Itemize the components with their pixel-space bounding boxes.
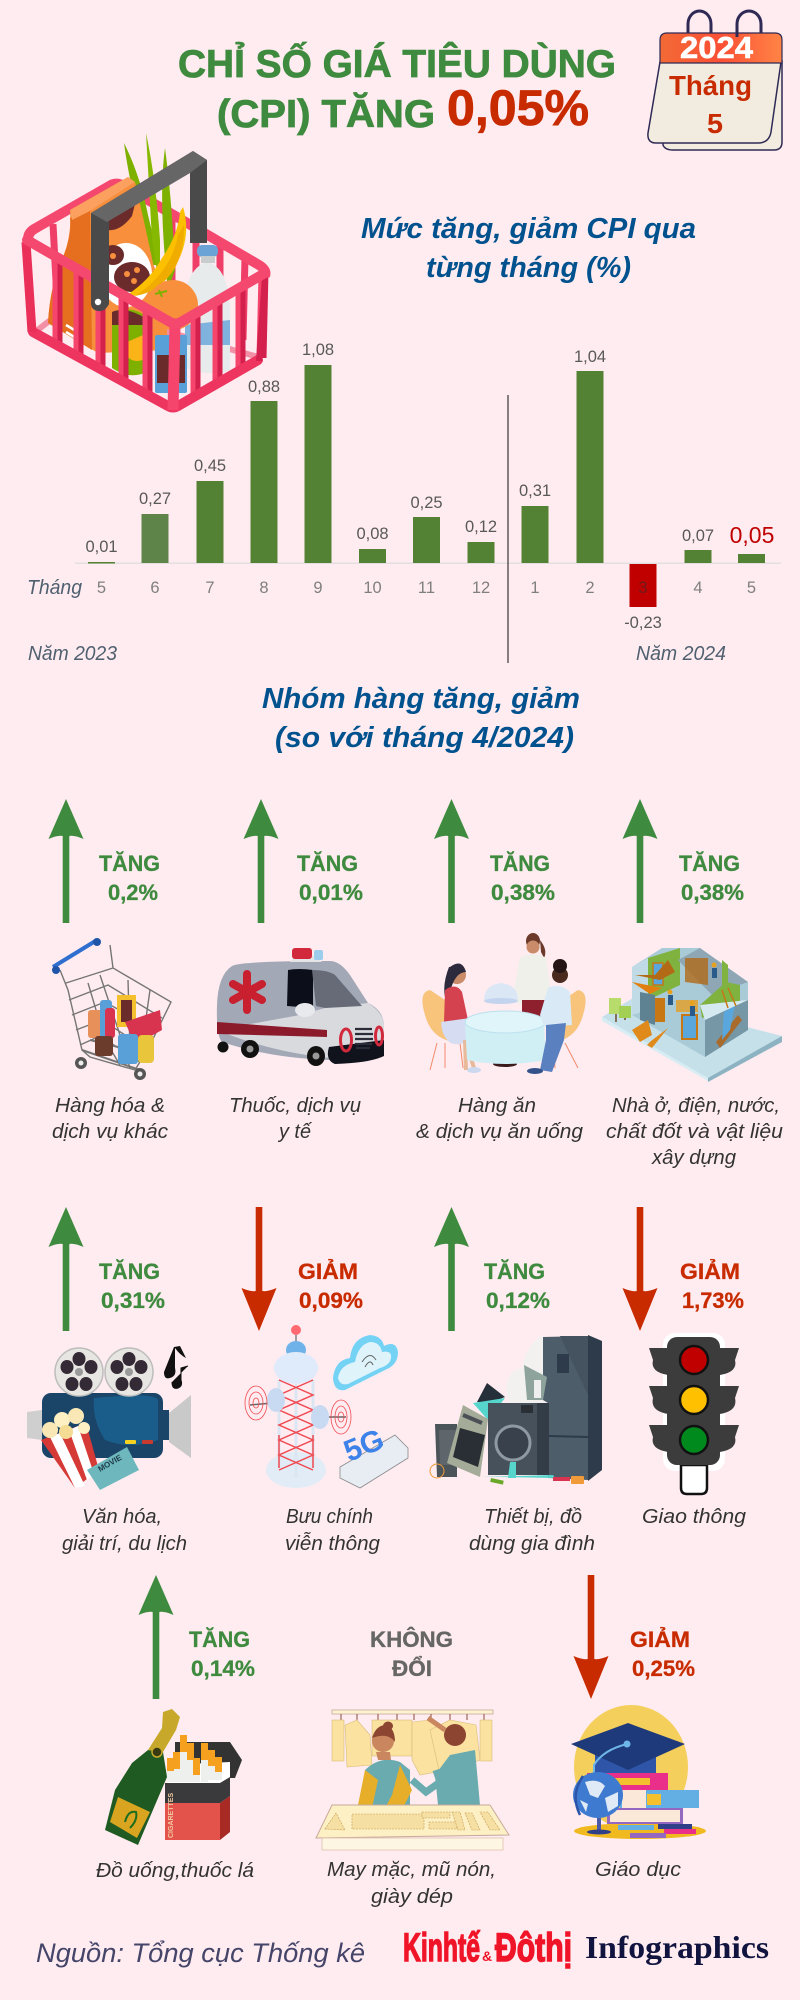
arrow: up — [48, 1207, 84, 1331]
bar chart: monthly CPI change: 5 — [97, 579, 106, 597]
icon: champagne and cigarettes — [105, 1709, 242, 1845]
value: up 0.38 percent: TĂNG — [679, 851, 740, 876]
panel: goods and other services — [48, 799, 171, 1143]
icon: calendar: Tháng — [669, 70, 752, 101]
value: down 1.73 percent — [680, 1259, 744, 1313]
icon: movie camera and popcorn: MOVIE — [96, 1453, 124, 1474]
caption — [285, 1506, 380, 1555]
arrow: up — [434, 1207, 469, 1331]
source note: Nguồn: Tổng cục Thống kê — [36, 1938, 365, 1968]
value: up 0.38 percent: TĂNG — [490, 851, 550, 876]
value: up 0.2 percent — [99, 851, 160, 905]
caption — [606, 1095, 783, 1169]
icon: traffic light — [649, 1333, 739, 1494]
caption: dùng gia đình — [469, 1533, 595, 1555]
bar chart: monthly CPI change: 2 — [585, 579, 595, 597]
value: unchanged: KHÔNG — [370, 1627, 453, 1652]
value: down 1.73 percent: 1,73% — [682, 1288, 744, 1313]
bar chart: monthly CPI change: 1,04 — [574, 348, 606, 366]
icon: 5G tower and cloud — [245, 1325, 408, 1488]
value: down 1.73 percent: GIẢM — [680, 1259, 740, 1284]
value: unchanged — [370, 1627, 453, 1681]
icon: movie camera and popcorn — [27, 1346, 191, 1490]
caption: Đồ uống,thuốc lá — [96, 1860, 254, 1882]
icon: calendar: 5 — [707, 108, 723, 139]
icon: restaurant scene — [422, 933, 586, 1074]
icon: calendar — [648, 11, 782, 150]
bar chart: monthly CPI change: 1 — [530, 579, 540, 597]
value: down 0.09 percent: GIẢM — [298, 1259, 358, 1284]
heading: monthly chart: từng tháng (%) — [426, 252, 631, 284]
caption: Giao thông — [642, 1506, 746, 1528]
arrow: up — [622, 799, 658, 923]
caption: chất đốt và vật liệu — [606, 1121, 783, 1143]
value: up 0.01 percent: 0,01% — [299, 880, 363, 905]
bar chart: monthly CPI change: 0,88 — [248, 378, 280, 396]
value: up 0.31 percent: TĂNG — [99, 1259, 160, 1284]
title: (CPI) TĂNG — [217, 92, 435, 136]
value: unchanged: ĐỔI — [392, 1656, 432, 1681]
bar chart: monthly CPI change: 12 — [472, 579, 490, 597]
value: up 0.14 percent: 0,14% — [191, 1656, 255, 1681]
bar chart: monthly CPI change: 6 — [150, 579, 160, 597]
panel: food and catering — [416, 799, 586, 1143]
bar chart: monthly CPI change: 0,08 — [356, 525, 389, 543]
value: up 0.14 percent: TĂNG — [189, 1627, 250, 1652]
bar chart: monthly CPI change — [27, 341, 781, 665]
arrow: up — [48, 799, 84, 923]
arrow: down — [622, 1207, 658, 1331]
value: up 0.38 percent: 0,38% — [681, 880, 744, 905]
caption: xây dựng — [651, 1147, 736, 1169]
panel: clothing, hats, footwear — [316, 1627, 509, 1908]
caption: Bưu chính — [286, 1506, 373, 1528]
icon: tailors at work — [316, 1710, 509, 1850]
arrow: down — [242, 1207, 276, 1331]
icon: household appliances — [430, 1335, 602, 1485]
logo: Kinh te & Do thi Infographics — [403, 1926, 769, 1970]
heading: product groups: Nhóm hàng tăng, giảm — [262, 683, 580, 715]
icon: graduation cap, globe and books — [571, 1705, 706, 1839]
caption — [229, 1095, 361, 1143]
caption: giày dép — [371, 1886, 453, 1908]
icon: ambulance — [217, 948, 384, 1066]
panel: housing, electricity, water, fuel — [602, 799, 783, 1169]
bar chart: monthly CPI change: 0,05 — [730, 522, 774, 548]
title — [178, 41, 616, 136]
panel: household appliances — [430, 1207, 602, 1555]
caption — [327, 1859, 496, 1908]
value: up 0.01 percent: TĂNG — [297, 851, 358, 876]
bar chart: monthly CPI change: 0,07 — [682, 527, 714, 545]
value: up 0.2 percent: 0,2% — [108, 880, 158, 905]
value: up 0.2 percent: TĂNG — [99, 851, 160, 876]
caption: Văn hóa, — [82, 1506, 162, 1528]
value: up 0.12 percent: TĂNG — [484, 1259, 545, 1284]
panel: beverages and tobacco — [96, 1575, 255, 1882]
bar chart: monthly CPI change: Năm 2024 — [636, 643, 726, 665]
logo: Kinh te & Do thi Infographics: & — [482, 1948, 492, 1964]
caption: viễn thông — [285, 1532, 380, 1555]
value: up 0.38 percent: 0,38% — [491, 880, 555, 905]
bar chart: monthly CPI change: 3 — [638, 579, 648, 597]
heading: product groups: (so với tháng 4/2024) — [275, 722, 574, 754]
icon: 5G tower and cloud: 5G — [339, 1423, 389, 1468]
bar chart: monthly CPI change: 10 — [363, 579, 382, 597]
bar chart: monthly CPI change: 8 — [259, 579, 269, 597]
caption — [62, 1506, 187, 1555]
bar chart: monthly CPI change: 1,08 — [302, 341, 334, 359]
bar chart: monthly CPI change: 4 — [693, 579, 703, 597]
value: up 0.38 percent — [679, 851, 744, 905]
icon: champagne and cigarettes: CIGARETTES — [168, 1793, 175, 1838]
arrow: up — [244, 799, 278, 923]
bar chart: monthly CPI change: 0,12 — [465, 518, 497, 536]
caption — [416, 1095, 583, 1143]
panel: medicine and health services — [217, 799, 384, 1143]
heading: monthly chart: Mức tăng, giảm CPI qua — [361, 213, 696, 245]
bar chart: monthly CPI change: 9 — [313, 579, 323, 597]
value: down 0.09 percent: 0,09% — [299, 1288, 363, 1313]
caption: Giáo dục — [595, 1859, 681, 1881]
bar chart: monthly CPI change: 0,45 — [194, 457, 226, 475]
title: CHỈ SỐ GIÁ TIÊU DÙNG — [178, 41, 616, 86]
heading: monthly chart — [361, 213, 696, 284]
arrow: down — [574, 1575, 608, 1699]
bar chart: monthly CPI change: 0,27 — [139, 490, 171, 508]
panel: education — [571, 1575, 706, 1881]
bar chart: monthly CPI change: 0,31 — [519, 482, 551, 500]
caption: May mặc, mũ nón, — [327, 1859, 496, 1881]
value: down 0.25 percent: GIẢM — [630, 1627, 690, 1652]
value: up 0.12 percent — [484, 1259, 550, 1313]
panel: transport — [622, 1207, 746, 1528]
caption — [469, 1506, 595, 1555]
bar chart: monthly CPI change: Năm 2023 — [28, 643, 117, 665]
panel: post and telecommunications — [242, 1207, 408, 1555]
logo: Kinh te & Do thi Infographics: Đôthị — [495, 1926, 572, 1970]
caption: Hàng ăn — [458, 1095, 536, 1117]
icon: shopping cart — [52, 938, 171, 1080]
logo: Kinh te & Do thi Infographics: Kinhtế — [403, 1926, 480, 1970]
title: 0,05% — [447, 80, 589, 136]
bar chart: monthly CPI change: 11 — [418, 579, 435, 597]
caption: & dịch vụ ăn uống — [416, 1121, 583, 1143]
arrow: up — [434, 799, 469, 923]
logo: Kinh te & Do thi Infographics: Infographics — [585, 1929, 769, 1965]
caption — [52, 1095, 168, 1143]
icon: calendar: 2024 — [680, 30, 754, 65]
arrow: up — [138, 1575, 174, 1699]
caption: Nhà ở, điện, nước, — [612, 1095, 780, 1117]
caption: Thuốc, dịch vụ — [229, 1095, 361, 1117]
caption: y tế — [277, 1121, 313, 1143]
icon: isometric house under construction — [602, 948, 782, 1082]
bar chart: monthly CPI change: -0,23 — [624, 614, 662, 632]
caption: Hàng hóa & — [55, 1095, 165, 1117]
heading: product groups — [262, 683, 580, 754]
bar chart: monthly CPI change: 7 — [205, 579, 215, 597]
value: up 0.12 percent: 0,12% — [486, 1288, 550, 1313]
value: up 0.14 percent — [189, 1627, 255, 1681]
value: up 0.31 percent — [99, 1259, 165, 1313]
caption: dịch vụ khác — [52, 1121, 168, 1143]
value: up 0.01 percent — [297, 851, 363, 905]
bar chart: monthly CPI change: 0,25 — [410, 494, 443, 512]
value: up 0.31 percent: 0,31% — [101, 1288, 165, 1313]
value: up 0.38 percent — [490, 851, 555, 905]
caption: Thiết bị, đồ — [484, 1506, 582, 1528]
value: down 0.25 percent: 0,25% — [632, 1656, 695, 1681]
caption: giải trí, du lịch — [62, 1533, 187, 1555]
bar chart: monthly CPI change: Tháng — [27, 577, 82, 599]
bar chart: monthly CPI change: 0,01 — [85, 538, 118, 556]
value: down 0.25 percent — [630, 1627, 695, 1681]
value: down 0.09 percent — [298, 1259, 363, 1313]
bar chart: monthly CPI change: 5 — [747, 579, 756, 597]
panel: culture, entertainment, tourism — [27, 1207, 191, 1555]
icon: shopping basket — [26, 133, 266, 410]
